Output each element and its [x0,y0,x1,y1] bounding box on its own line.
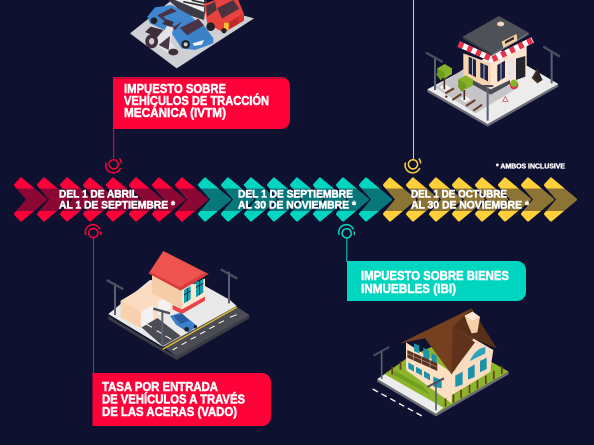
marker: IVTM target [106,158,121,173]
marker: yellow target [405,158,421,173]
date label: teal period: AL 30 DE NOVIEMBRE * [238,200,357,212]
callout: IVTM: VEHÍCULOS DE TRACCIÓN [124,93,269,108]
date label: red period: DEL 1 DE ABRIL [59,188,138,200]
date label: teal period [238,188,357,212]
date label: yellow period: AL 30 DE NOVIEMBRE * [411,200,530,212]
callout: VADO [92,373,271,426]
callout: VADO: TASA POR ENTRADA [102,380,218,394]
illustration: house with driveway [107,251,249,360]
note: ambos inclusive: * AMBOS INCLUSIVE [496,164,565,170]
callout line: IBI [346,238,348,262]
red chevrons [16,179,206,220]
timeline: chevrons [14,179,578,220]
callout: IBI: IMPUESTO SOBRE BIENES [361,269,509,283]
callout: IVTM: IMPUESTO SOBRE [124,82,226,96]
date label: red period: AL 1 DE SEPTIEMBRE * [59,200,176,212]
marker: VADO target [85,225,101,238]
callout: VADO: DE VEHÍCULOS A TRAVÉS [102,392,245,406]
callout: IVTM [113,77,290,129]
callout: IBI [347,261,526,301]
illustration: detached house [373,308,509,418]
callout: IBI: INMUEBLES (IBI) [361,282,456,296]
callout: VADO: DE LAS ACERAS (VADO) [102,405,237,419]
callout: IVTM: MECÁNICA (IVTM) [124,105,226,120]
date label: yellow period [411,188,530,212]
yellow chevrons [384,179,576,220]
illustration: shop [426,16,560,127]
callout line: yellow [412,0,414,159]
callout line: VADO [92,238,94,374]
date label: yellow period: DEL 1 DE OCTUBRE [411,188,507,200]
illustration: vehicles on grey plate [130,0,254,68]
date label: red period [59,188,176,212]
teal chevrons [200,179,390,220]
marker: IBI target [339,225,354,238]
callout line: IVTM [113,125,115,158]
date label: teal period: DEL 1 DE SEPTIEMBRE [238,188,353,200]
